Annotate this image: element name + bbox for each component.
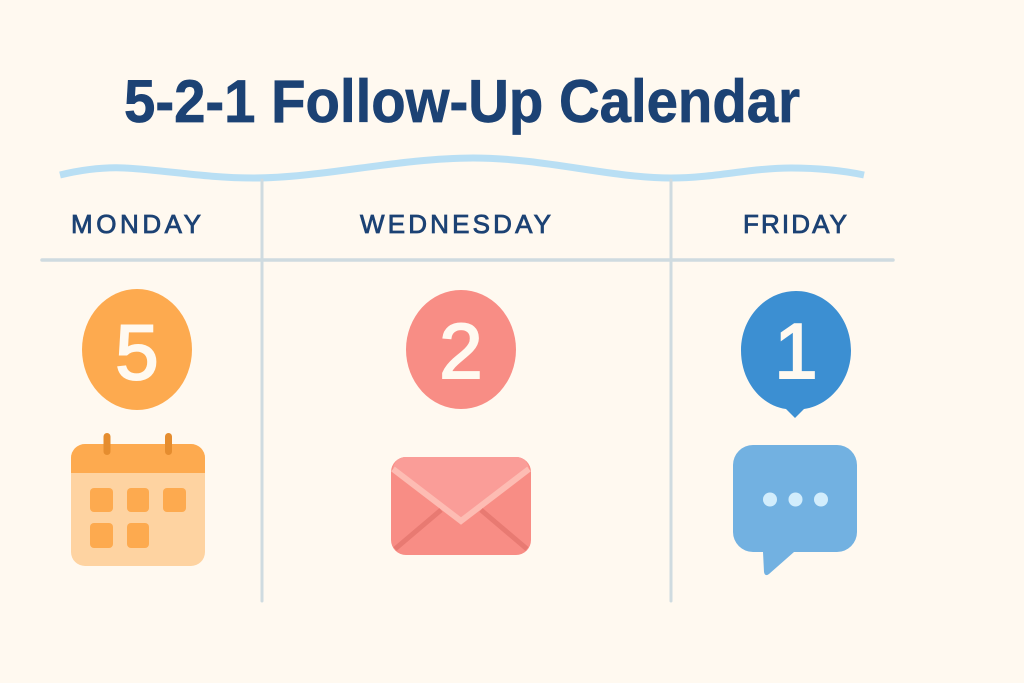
title: 5-2-1 Follow-Up Calendar (124, 68, 800, 135)
icon: chat bubble (733, 445, 857, 575)
icon: envelope (391, 457, 531, 555)
wavy header line (60, 158, 864, 178)
day label: Monday: MONDAY (71, 209, 201, 239)
number badge: 2 (406, 290, 516, 409)
icon: calendar (71, 433, 205, 566)
number badge: 2: 2 (439, 307, 483, 395)
number badge: 1: 1 (774, 307, 818, 395)
day label: Friday: FRIDAY (743, 209, 847, 239)
number badge: 5: 5 (115, 308, 159, 396)
calendar grid lines (42, 180, 893, 601)
number badge: 1 (741, 291, 851, 418)
day label: Wednesday: WEDNESDAY (360, 209, 551, 239)
number badge: 5 (82, 289, 192, 410)
